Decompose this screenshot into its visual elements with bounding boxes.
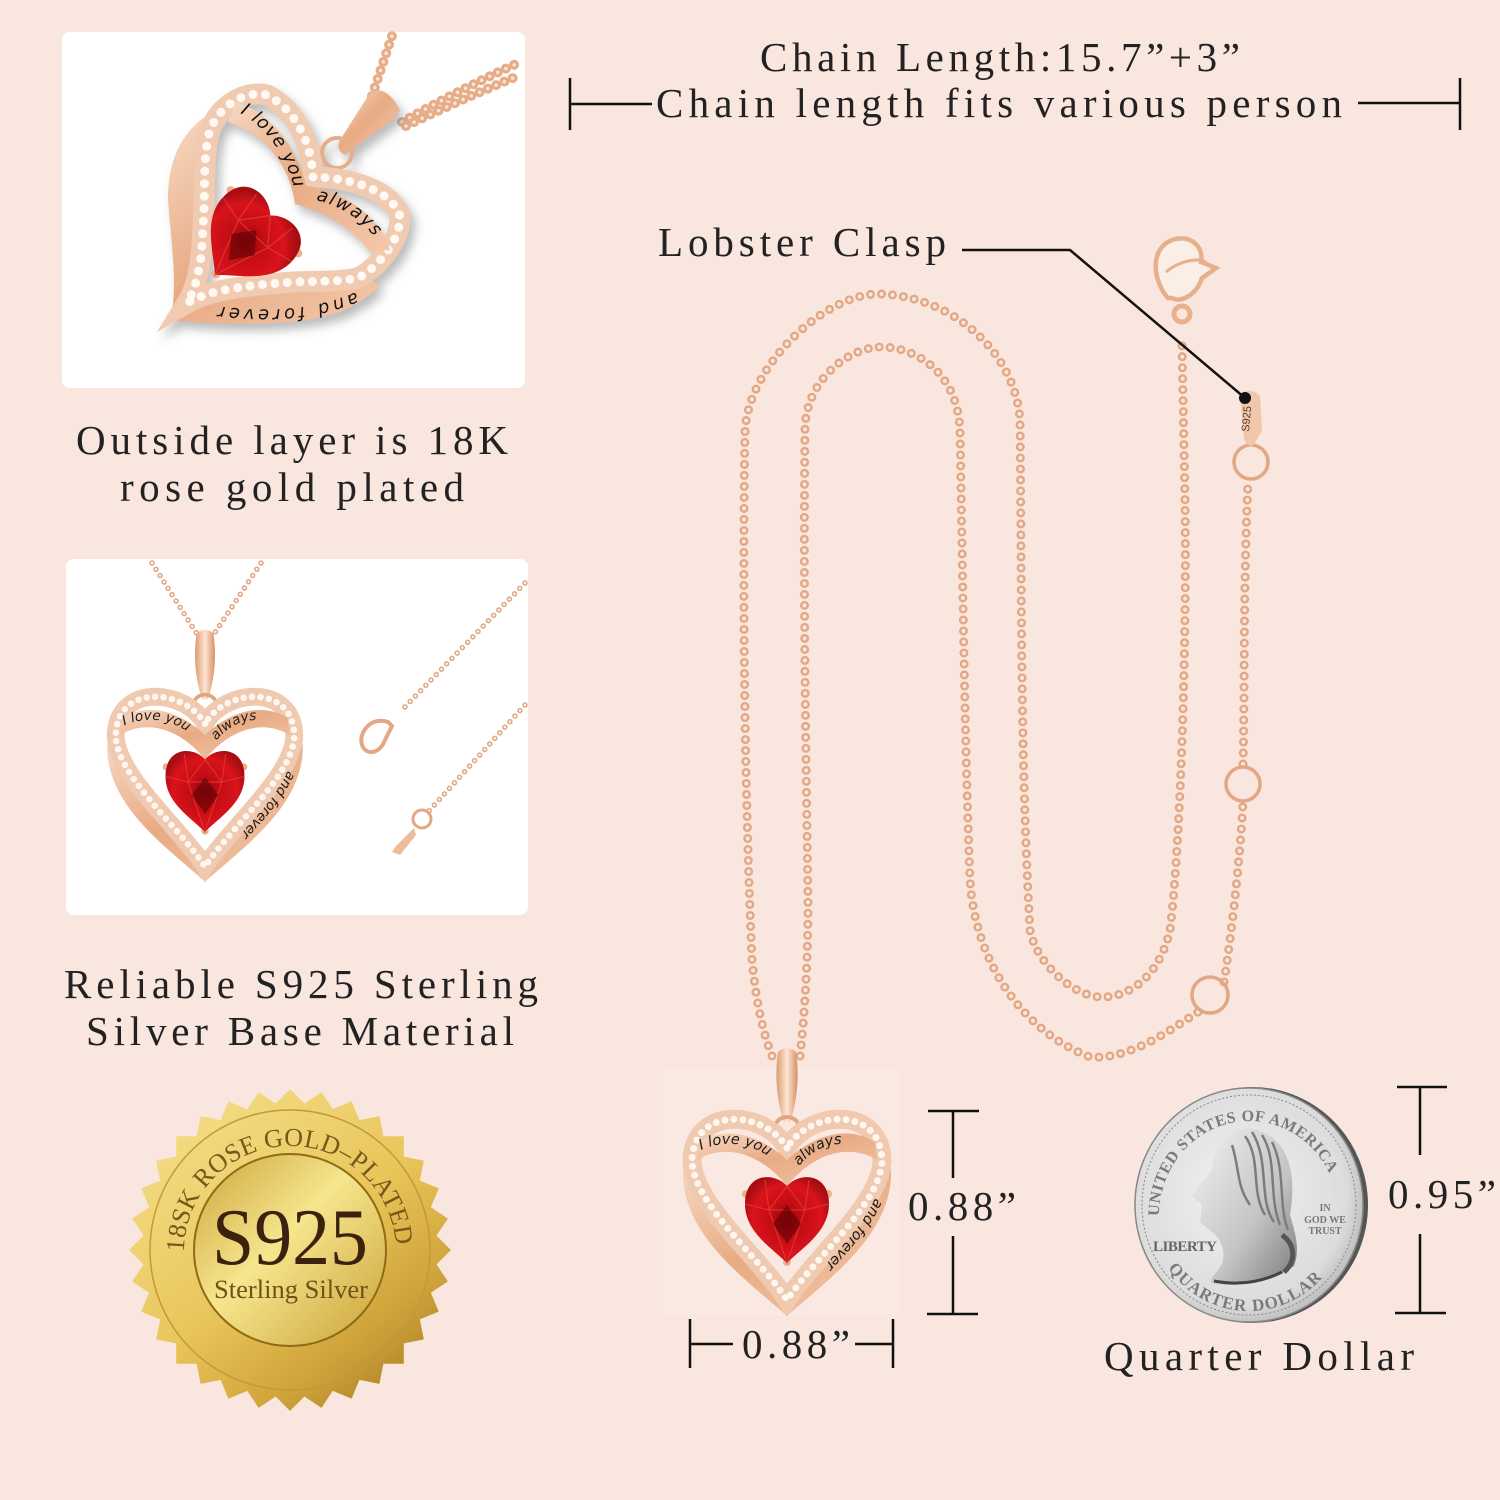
dimension: quarter height: 0.95” — [1388, 1171, 1496, 1217]
icon: chain segments — [152, 563, 525, 855]
icon: lobster clasp — [1156, 238, 1216, 322]
icon: extender rings — [1192, 445, 1268, 1013]
icon: quarter dollar coin: LIBERTY — [1153, 1239, 1217, 1255]
icon: heart pendant: always — [795, 1136, 841, 1165]
icon: heart pendant tilted: always — [317, 192, 382, 234]
text: rose gold caption: rose gold plated — [120, 464, 464, 510]
panel: rose gold close-up photo — [62, 31, 525, 388]
icon: quarter dollar coin: IN — [1319, 1203, 1331, 1214]
dimension: pendant height — [908, 1111, 1016, 1314]
icon: heart pendant: and forever — [828, 1199, 881, 1272]
text: silver base caption: Silver Base Material — [86, 1008, 514, 1054]
icon: gold S925 seal: Sterling Silver — [214, 1275, 368, 1304]
icon: gold S925 seal: 18SK ROSE GOLD–PLATED — [167, 1128, 412, 1250]
icon: heart pendant tilted — [157, 84, 420, 340]
icon: quarter dollar coin: GOD WE — [1304, 1215, 1346, 1226]
dimension: quarter height — [1388, 1087, 1496, 1313]
callout: lobster clasp: Lobster Clasp — [658, 219, 946, 265]
text: silver base caption — [64, 961, 538, 1054]
icon: heart pendant front: I love you — [122, 712, 191, 730]
icon: heart pendant tilted: I love you — [240, 103, 304, 186]
heading: chain length with dimension arrows: Chain length fits various person — [656, 80, 1342, 126]
dimension: pendant width: 0.88” — [742, 1321, 850, 1367]
necklace chain — [744, 294, 1268, 1057]
panel: pendant at actual size — [682, 1048, 892, 1317]
panel: necklace and clasp photo — [66, 559, 528, 915]
text: silver base caption: Reliable S925 Sterling — [64, 961, 538, 1007]
icon: quarter dollar coin — [1134, 1087, 1368, 1323]
text: rose gold caption: Outside layer is 18K — [76, 417, 508, 463]
icon: quarter dollar coin: QUARTER DOLLAR — [1170, 1264, 1322, 1312]
icon: gold S925 seal: S925 — [212, 1194, 368, 1282]
icon: heart pendant front — [106, 630, 304, 882]
heading: chain length with dimension arrows: Chain Length:15.7”+3” — [760, 34, 1240, 80]
icon: heart pendant — [682, 1048, 892, 1317]
text: quarter dollar label: Quarter Dollar — [1104, 1333, 1414, 1379]
icon: quarter dollar coin: TRUST — [1308, 1226, 1342, 1237]
portrait bust — [1191, 1128, 1297, 1285]
callout: lobster clasp — [658, 219, 1251, 404]
dimension: pendant height: 0.88” — [908, 1183, 1016, 1229]
icon: S925 tag: S925 — [1240, 406, 1254, 432]
text: rose gold caption — [76, 417, 508, 510]
icon: heart pendant: I love you — [699, 1135, 772, 1155]
icon: rope chain to pendant — [372, 36, 520, 126]
icon: quarter dollar coin: UNITED STATES OF AMERICA — [1148, 1110, 1336, 1216]
dimension: pendant width — [690, 1319, 893, 1368]
icon: S925 tag — [1240, 391, 1262, 447]
icon: heart pendant front: always — [212, 712, 256, 740]
icon: heart pendant front: and forever — [243, 772, 294, 840]
icon: heart pendant tilted: and forever — [216, 293, 357, 322]
heading: chain length with dimension arrows — [570, 34, 1460, 130]
icon: gold S925 seal — [129, 1089, 451, 1411]
